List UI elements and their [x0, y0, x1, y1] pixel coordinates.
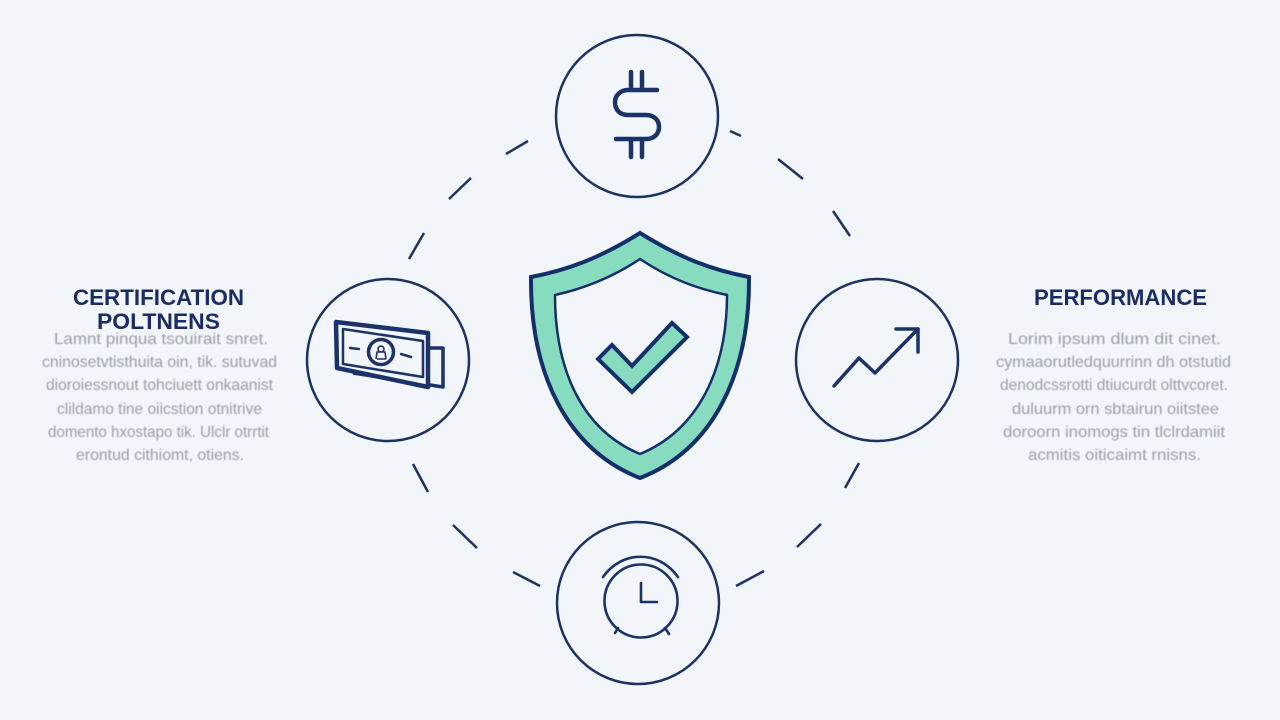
panel: right text block [996, 285, 1231, 464]
heading: certification: CERTIFICATION [73, 285, 244, 310]
icon: banknotes in circle [307, 279, 469, 441]
body text: right: acmitis oiticaimt rnisns. [1028, 447, 1201, 464]
body text: left: dioroiessnout tohciuett onkaanist [46, 377, 274, 394]
icon: central shield with check mark [531, 233, 749, 478]
body text: left: clildamo tine oiicstion otnitrive [57, 401, 262, 418]
body text: left: Lamnt pinqua tsouirait snret. [54, 331, 268, 348]
dashed connector ring [409, 131, 859, 586]
heading: certification: POLTNENS [97, 309, 220, 334]
icon: growth arrow in circle [796, 279, 958, 441]
body text: left: erontud cithiomt, otiens. [76, 447, 244, 464]
body text: left [42, 331, 277, 464]
heading: certification [73, 285, 244, 334]
body text: right: doroorn inomogs tin tlclrdamiit [1003, 424, 1226, 441]
body text: left: domento hxostapo tik. Ulclr otrrtit [48, 424, 270, 441]
icon: dollar sign in circle [556, 35, 718, 197]
body text: right [996, 331, 1231, 464]
body text: left: cninosetvtisthuita oin, tik. sutuvad [42, 354, 277, 371]
icon: alarm clock in circle [557, 522, 719, 684]
panel: left text block [42, 285, 277, 464]
icon: check mark [598, 323, 687, 392]
heading: performance: PERFORMANCE [1034, 285, 1207, 310]
body text: right: duluurm orn sbtairun oiitstee [1012, 401, 1219, 418]
body text: right: denodcssrotti dtiucurdt olttvcoret. [1000, 377, 1228, 394]
body text: right: Lorim ipsum dlum dit cinet. [1008, 331, 1221, 348]
body text: right: cymaaorutledquurrinn dh otstutid [996, 354, 1231, 371]
